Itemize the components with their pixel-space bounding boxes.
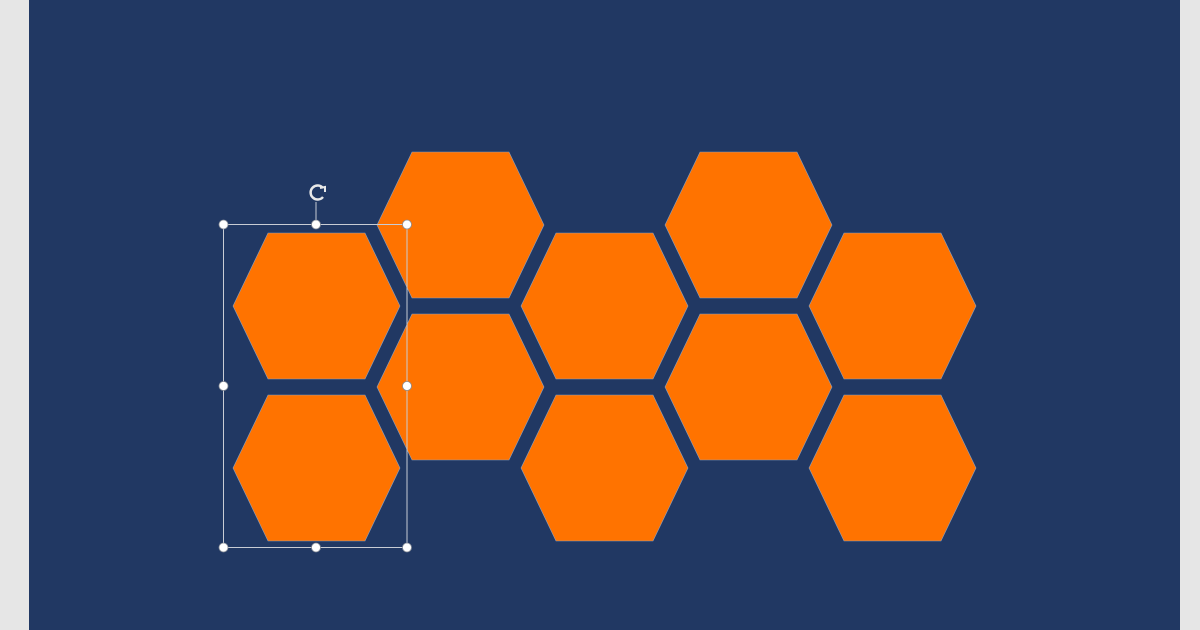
icon: rotate handle [311, 186, 325, 200]
honeycomb hexagons [233, 152, 976, 541]
selection box with handles [219, 186, 412, 552]
